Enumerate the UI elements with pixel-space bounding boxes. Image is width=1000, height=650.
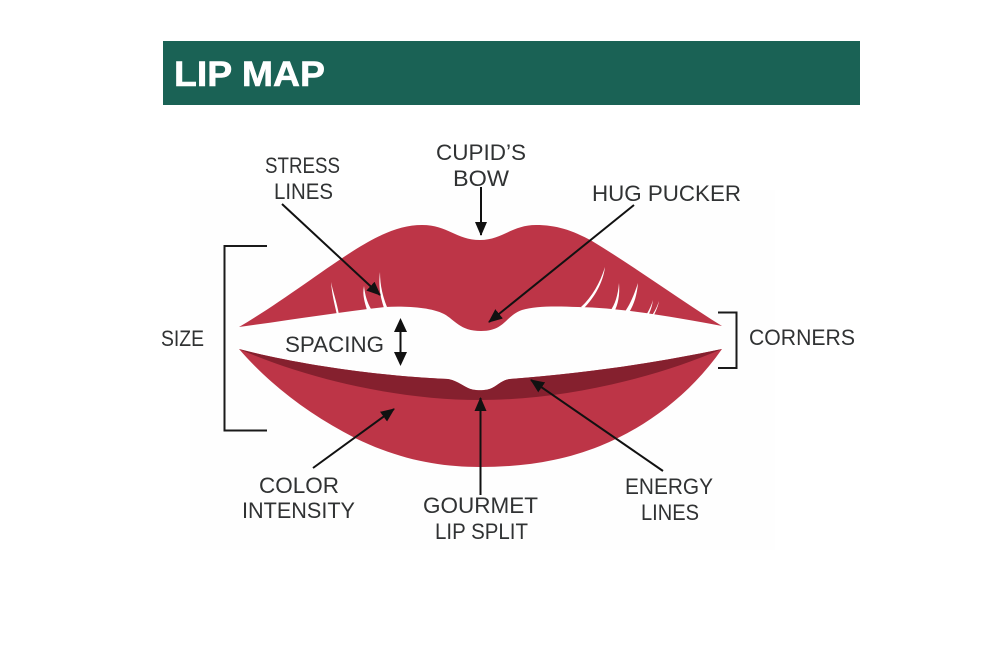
arrow: color intensity [313,409,394,468]
label: stress lines: STRESS [265,153,340,178]
arrow: energy lines [531,380,663,471]
lower lip shadow [239,349,722,400]
label: hug pucker: HUG PUCKER [592,181,741,206]
label: color intensity: COLOR [259,473,339,498]
label: energy lines: ENERGY [625,474,713,499]
label: color intensity: INTENSITY [242,498,355,523]
arrow: spacing [394,318,407,366]
title: LIP MAP [174,55,325,94]
stress lines: right [581,267,659,319]
label: corners: CORNERS [749,325,855,350]
upper lip [239,225,722,331]
arrow: stress lines [282,204,380,295]
label: gourmet lip split: LIP SPLIT [435,519,528,544]
label: stress lines: LINES [274,179,333,204]
label: energy lines [625,474,713,525]
arrow: hug pucker [489,205,634,322]
bracket: size [224,246,267,430]
label: size: SIZE [161,326,204,351]
label: color intensity [242,473,355,523]
title banner [163,41,860,105]
lower lip [239,349,722,467]
bracket: corners [718,312,736,368]
label: gourmet lip split: GOURMET [423,493,538,518]
label: energy lines: LINES [641,500,699,525]
label: cupid's bow: BOW [453,166,509,191]
label: spacing: SPACING [285,332,384,357]
arrow: gourmet lip split [480,398,482,495]
label: stress lines [265,153,340,204]
label: gourmet lip split [423,493,538,544]
arrow: cupid's bow [480,187,482,235]
label: cupid's bow [436,140,526,191]
stress lines: left [331,272,387,315]
label: cupid's bow: CUPID’S [436,140,526,165]
